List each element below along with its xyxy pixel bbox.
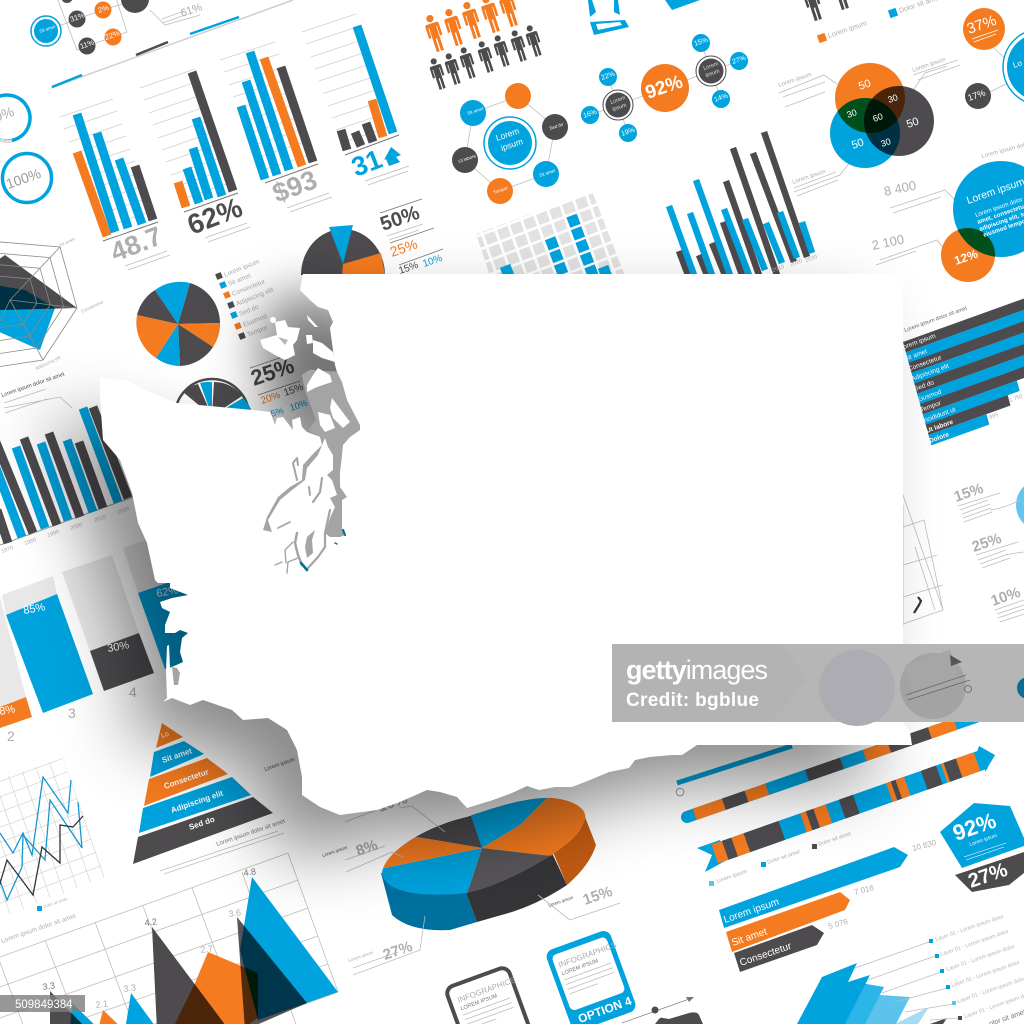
stats: 50% 25% 15% 10%	[377, 199, 444, 277]
network diagram: Lorem ipsum hub: Sed do	[549, 121, 564, 131]
pie legend: Adipiscing elit	[235, 286, 275, 308]
venn diagram	[778, 57, 960, 196]
pie legend: Sit amet	[227, 272, 252, 288]
San Juan islands	[260, 315, 335, 362]
network diagram: 92%: 27%	[731, 55, 747, 66]
option box 3: INFOGRAPHICS	[456, 975, 517, 1005]
pyramid chart: Sed do	[188, 815, 216, 832]
horizontal bar chart: right: Sit amet	[903, 348, 928, 363]
3D pie callouts: 10%	[376, 790, 410, 816]
column chart: percent fill: 85%	[22, 601, 46, 617]
layered area fan chart: Layer 01 - Lorem ipsum dolor	[935, 914, 1005, 943]
network diagram: 92%: ipsum	[612, 102, 628, 113]
org chart: top left circles	[31, 0, 204, 54]
Grays Harbor grey fleck	[172, 667, 180, 685]
radar chart: Adipiscing elit	[34, 354, 62, 371]
network diagram: 92%: Lorem	[610, 95, 627, 106]
option box 3	[445, 965, 539, 1024]
Washington state silhouette	[100, 274, 912, 815]
horizontal bar chart: right: Dolore	[928, 431, 950, 445]
bar chart: 31 up	[302, 14, 409, 185]
stats: 50% 25% 15% 10%: 10%	[421, 253, 444, 270]
3D pie callouts: Lorem ipsum	[548, 895, 574, 908]
stats: 50% 25% 15% 10%: 25%	[388, 236, 419, 260]
3D pie callouts: 15%	[581, 883, 615, 909]
bar chart: left years	[0, 371, 133, 555]
thin blue bar	[676, 746, 792, 796]
donut callouts: 15% 25% 10%: 15%	[952, 480, 986, 506]
horizontal bar chart: right: Incididunt ut	[921, 406, 957, 425]
venn diagram: 60	[871, 111, 884, 124]
percent ring: partial	[0, 87, 38, 149]
bar chart: left years: 1990	[47, 529, 60, 539]
striped ribbon arrow	[697, 746, 995, 872]
radar chart	[0, 236, 105, 371]
pyramid chart	[133, 723, 286, 874]
south sound inlet	[305, 530, 315, 558]
network diagram: Lorem ipsum hub	[452, 83, 568, 204]
arrow banners: 7 016	[853, 883, 875, 897]
arrow banners: 10 830	[911, 838, 938, 853]
horizontal bar chart: right: 1 750	[1009, 394, 1024, 404]
stats: 25% 20% 15% 10%: 15%	[282, 382, 305, 399]
column chart: percent fill: 4	[129, 684, 137, 700]
triangle area chart: 3.3	[42, 980, 56, 992]
column chart: percent fill: 62%	[155, 584, 179, 600]
icon: up arrow	[384, 147, 401, 166]
network diagram: 92%: ipsum	[705, 68, 721, 79]
blue and orange circles with callouts: Lorem ipsum dolor	[975, 197, 1024, 219]
line chart: Dolor sit amet	[43, 896, 68, 909]
map grid: right	[903, 495, 943, 625]
triangle area chart	[0, 853, 338, 1024]
org chart: top left circles: 31%	[69, 10, 86, 24]
stats: 50% 25% 15% 10%: 15%	[397, 260, 420, 277]
people pictogram: dark row	[427, 24, 544, 91]
3D pie callouts: 8%	[354, 837, 380, 860]
org chart: top left circles: 22%	[104, 28, 121, 42]
horizontal bar chart: right: Lorem ipsum dolor sit amet	[904, 305, 968, 334]
triangle area chart: 3.3	[123, 982, 137, 994]
network diagram: Lorem ipsum hub: Sit amet	[467, 106, 485, 116]
half pie chart: segmented lower	[175, 379, 252, 453]
bar chart: left years: Lorem ipsum dolor sit amet	[1, 371, 66, 399]
3D pie callouts: Lorem ipsum	[322, 845, 348, 858]
venn diagram: 50	[905, 116, 921, 131]
bar chart: $93	[220, 42, 332, 212]
image ID label	[0, 995, 85, 1012]
ribbon legend: Dolor sit amet	[818, 831, 852, 848]
triangle area chart: 4.8	[243, 866, 257, 878]
Puget Sound waters	[172, 368, 360, 685]
bar chart: years top right: 2010	[772, 264, 785, 274]
ribbon legend: Dolor sit amet	[767, 849, 801, 866]
blue and orange circles with callouts: 8 400	[883, 177, 917, 199]
column chart: percent fill: 2	[7, 728, 15, 744]
watermark: Getty Images: Credit: bgblue	[626, 690, 759, 711]
bar chart: years top right	[669, 132, 818, 275]
bar chart: left years: 2000	[70, 522, 83, 532]
org chart: top left circles: 61%	[179, 1, 204, 20]
horizontal bar chart: right: Consectetur	[907, 354, 943, 373]
venn diagram: Lorem ipsum	[778, 72, 812, 89]
3D pie callouts	[264, 757, 620, 975]
org chart: top left circles: 11%	[79, 38, 96, 51]
arrow banners: Sit amet	[730, 926, 769, 949]
circles: top right 37% and 17%	[963, 8, 1024, 109]
bar chart: years top right: 2020	[790, 258, 803, 268]
horizontal bar chart: right: Adipiscing elit	[910, 363, 950, 383]
bar chart: 31 up: 31	[347, 144, 386, 183]
image ID label: 509849384	[15, 999, 73, 1011]
3D pie callouts: Lorem ipsum	[264, 757, 296, 773]
bar chart: years top right: 2030	[805, 254, 818, 264]
network diagram: 92%: 19%	[620, 127, 636, 138]
badge: 92% and 27%: Lorem ipsum	[969, 833, 998, 848]
pyramid chart: Adipiscing elit	[170, 788, 225, 815]
people pictogram: top right with legend	[800, 0, 942, 43]
pie legend	[215, 258, 275, 340]
donut callouts: 15% 25% 10%: 25%	[970, 530, 1004, 556]
bar chart: left years: 1980	[24, 537, 37, 547]
3D pie callouts: 27%	[381, 938, 415, 964]
stats: 25% 20% 15% 10%: 20%	[259, 390, 282, 407]
network diagram: 92%: 16%	[582, 109, 598, 120]
horizontal bar chart: right: Tempor	[919, 400, 943, 414]
Bainbridge and Vashon islands	[318, 398, 350, 432]
pyramid chart: Lo	[160, 731, 170, 740]
percent ring: 100%: 100%	[4, 165, 43, 192]
network diagram: 92%: 15%	[693, 37, 709, 48]
pie legend: Lorem ipsum	[223, 258, 261, 279]
state shadow	[62, 312, 874, 853]
southern inlets	[275, 458, 330, 573]
venn diagram: 30	[879, 136, 892, 149]
horizontal bar chart: right: Sed do	[913, 379, 935, 393]
layered area fan chart: Layer 01 - Lorem ipsum dolor	[946, 944, 1016, 973]
half pie chart: 50%	[301, 225, 385, 275]
venn diagram: 30	[886, 92, 899, 105]
people pictogram: orange row	[422, 0, 521, 53]
striped bar: rounded	[685, 711, 978, 823]
horizontal bar chart: right: Ut labore	[925, 419, 955, 435]
people pictogram: top right with legend: Lorem ipsum	[827, 20, 868, 40]
column chart: percent fill	[0, 530, 216, 744]
network diagram: Lorem ipsum hub: Sit amet	[539, 168, 557, 178]
column chart: percent fill: 30%	[106, 639, 130, 655]
pyramid chart: Consectetur	[163, 767, 210, 791]
bar chart: 48.7: 48.7	[106, 221, 166, 268]
triangle area chart: 2.1	[95, 998, 109, 1010]
timeline: top	[51, 0, 293, 88]
ribbon legend: Lorem ipsum	[716, 869, 748, 885]
stats: 25% 20% 15% 10%	[247, 353, 309, 419]
org chart: top left circles: Sit amet	[39, 24, 57, 34]
stats: 50% 25% 15% 10%: 50%	[377, 202, 423, 236]
pie chart: seven wedges	[136, 282, 220, 366]
badge: 92% and 27%: 27%	[965, 859, 1011, 893]
circles: top right 37% and 17%: Lo	[1012, 58, 1024, 70]
bar chart: $93: $93	[268, 164, 321, 209]
3D pie callouts: Lorem ipsum	[348, 950, 374, 963]
arrow banners: Consectetur	[738, 941, 794, 969]
venn diagram: Lorem ipsum	[792, 169, 826, 186]
blue and orange circles with callouts: 12%	[952, 247, 980, 268]
radar chart: Sit amet	[58, 236, 76, 248]
circles: top right 37% and 17%: 37%	[965, 12, 999, 38]
horizontal bar chart: right: orem ipsum	[902, 333, 937, 351]
network diagram: 92%: Lorem	[703, 61, 720, 72]
bar chart: left years: 2020	[117, 506, 130, 516]
icon: blue tray	[588, 0, 700, 35]
donut callouts: 15% 25% 10%	[952, 479, 1024, 622]
stats: 25% 20% 15% 10%: 25%	[247, 353, 297, 391]
pyramid chart: Sit amet	[161, 746, 193, 765]
badge: 92% and 27%	[940, 803, 1024, 893]
triangle area chart: Lorem ipsum dolor sit amet	[0, 913, 77, 945]
blue and orange circles with callouts	[871, 141, 1024, 282]
venn diagram: 50	[857, 78, 873, 93]
arrow banners: 5 076	[827, 917, 849, 931]
layered area fan chart: Layer 01 - Lorem ipsum dolor	[940, 929, 1010, 958]
line chart	[0, 758, 105, 918]
teal water bits	[301, 530, 345, 570]
bar chart: left years: 1970	[1, 545, 14, 555]
grid waffle chart	[476, 191, 625, 279]
option box 3: LOREM IPSUM	[460, 993, 499, 1012]
watermark: Getty Images: gettyimages	[626, 655, 768, 685]
network diagram: Lorem ipsum hub: Ut labore	[458, 153, 477, 164]
donut callouts: 15% 25% 10%: 10%	[989, 584, 1023, 610]
venn diagram: 30	[845, 107, 858, 120]
Whidbey island	[307, 368, 332, 392]
venn diagram: Lorem ipsum	[912, 57, 946, 74]
triangle area chart: 4.2	[144, 916, 158, 928]
network diagram: 92%	[581, 34, 748, 142]
triangle area chart: 3.6	[228, 907, 242, 919]
option box 4: INFOGRAPHICS	[557, 940, 618, 970]
layered area fan chart: Layer 01 - Lorem ipsum dolor	[951, 960, 1021, 989]
network diagram: 92%: 14%	[713, 93, 729, 104]
network diagram: Lorem ipsum hub: ipsum	[499, 136, 524, 153]
3D pie chart	[381, 798, 596, 930]
arrow banners: Lorem ipsum	[722, 897, 781, 926]
stats: 25% 20% 15% 10%: 10%	[288, 398, 309, 413]
network diagram: Lorem ipsum hub: Tempor	[493, 185, 509, 195]
network diagram: 92%: 92%	[643, 71, 686, 104]
venn diagram: 50	[850, 137, 866, 152]
blue and orange circles with callouts: 2 100	[871, 231, 905, 253]
layered area fan chart	[797, 914, 1024, 1024]
option box 4: LOREM IPSUM	[561, 958, 600, 977]
bar chart: 48.7	[60, 99, 170, 270]
arrow banners	[719, 838, 938, 972]
bar chart: 62%: 62%	[183, 192, 247, 241]
percent ring: 100%	[2, 154, 52, 202]
badge: 92% and 27%: 92%	[949, 808, 999, 846]
circles: top right 37% and 17%: 17%	[966, 88, 987, 103]
pie legend: Tempor	[246, 324, 270, 339]
pyramid chart: Lorem ipsum dolor sit amet	[216, 819, 286, 848]
horizontal bar chart: right: 990	[989, 412, 999, 421]
horizontal bar chart: right	[902, 292, 1024, 445]
pie legend: Sed do	[238, 304, 260, 318]
radar chart: Consectetur	[80, 299, 105, 314]
pie legend: Consectetur	[231, 278, 267, 298]
option box 4	[544, 928, 639, 1024]
org chart: top left circles: 2%	[97, 3, 110, 15]
watermark: Getty Images	[612, 644, 1024, 726]
pie legend: Eiusmod	[242, 313, 269, 329]
column chart: percent fill: 3	[68, 705, 76, 721]
ribbon legend	[709, 831, 852, 886]
network diagram: 92%: 22%	[600, 71, 616, 82]
bar chart: left years: 2010	[94, 514, 107, 524]
grey lagoon on the big island	[278, 337, 288, 345]
horizontal bar chart: right: Eiusmod	[916, 389, 943, 404]
stats: 25% 20% 15% 10%: 5%	[269, 405, 285, 419]
shadow over San Juan area	[257, 293, 353, 417]
bar chart: 62%	[140, 69, 250, 242]
triangle area chart: 2.7	[200, 943, 214, 955]
timeline arrow	[622, 997, 703, 1024]
network diagram: Lorem ipsum hub: Lorem	[494, 126, 520, 143]
